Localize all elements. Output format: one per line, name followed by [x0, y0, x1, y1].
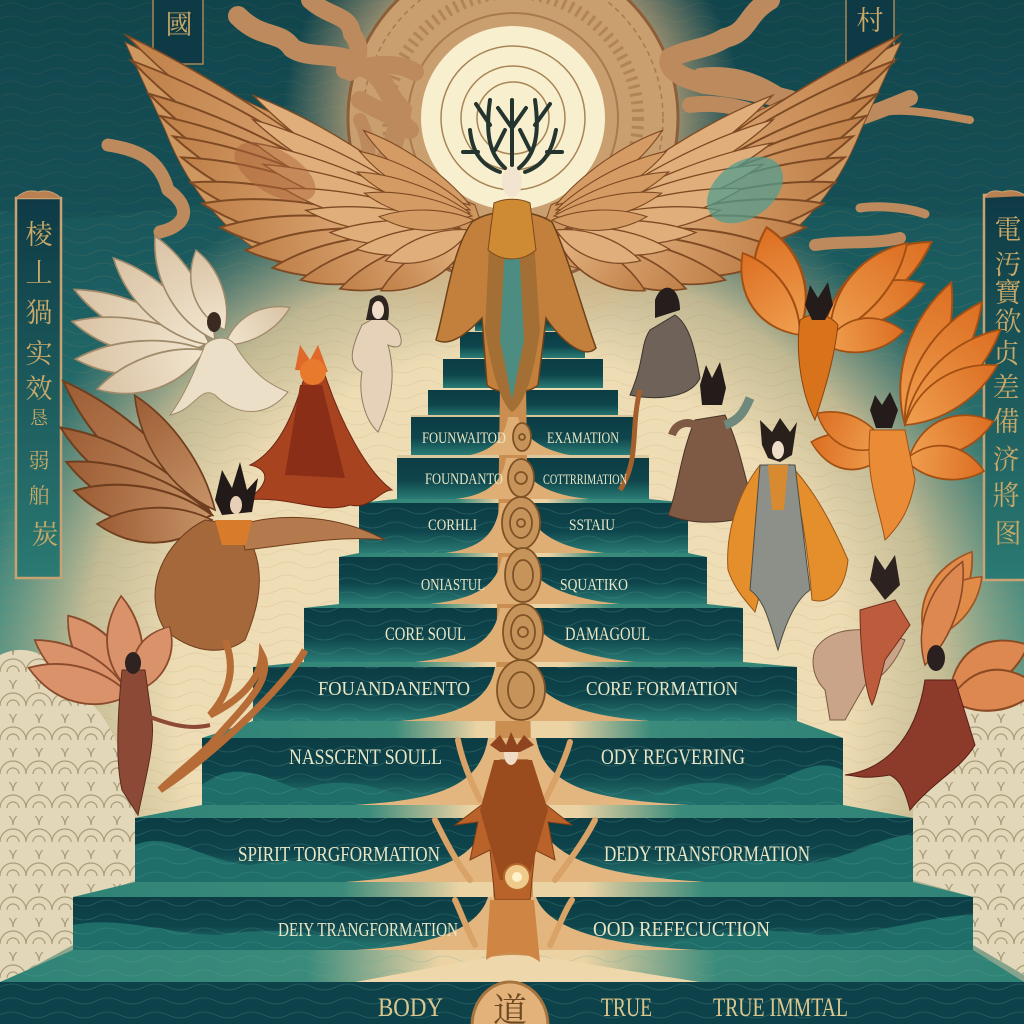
figure: amber robed maiden [728, 418, 848, 650]
cloud bank: lower left [0, 650, 135, 985]
step 2 labels: FOUNDANTO [425, 471, 503, 488]
base step labels: TRUE IMMTAL [713, 993, 848, 1022]
step 5 labels [385, 624, 650, 645]
step 8 labels [238, 841, 810, 866]
step 9 labels [278, 917, 770, 941]
banner: right column: 差 [992, 366, 1020, 405]
step 8 labels: SPIRIT TORGFORMATION [238, 842, 440, 866]
inner robe [485, 225, 540, 412]
central winged deity [436, 100, 596, 412]
wing accent: rust patch [225, 130, 325, 214]
figure: crimson flame robed spirit [245, 345, 392, 508]
figure: winged dancer lower left [23, 594, 210, 815]
step 1 labels: FOUNWAITOD [422, 430, 506, 447]
step 9 labels: DEIY TRANGFORMATION [278, 919, 458, 941]
left wing of central figure [117, 25, 490, 306]
base step labels: TRUE [601, 993, 652, 1022]
banner: right column: 寶 [994, 271, 1022, 310]
sun halo disc with inscribed ring [283, 0, 743, 348]
central energy column with flares on each step [345, 385, 705, 982]
flowing outer robe [436, 212, 596, 392]
base step labels [378, 993, 848, 1022]
wave hills on lower steps [73, 765, 973, 950]
step 2 labels: COTTRRIMATION [543, 472, 627, 488]
treads [0, 415, 1024, 982]
figure: white phoenix spirit [67, 230, 295, 415]
lower central figure [455, 732, 572, 962]
face [502, 167, 522, 197]
wave texture on steps [0, 503, 1024, 1024]
step 2 labels [425, 471, 627, 488]
top steps [428, 315, 618, 417]
base step labels: BODY [378, 993, 443, 1022]
teal inner panel [500, 245, 524, 400]
step labels, left column and right column [238, 430, 810, 941]
banner: right column: 電 [994, 208, 1022, 247]
banner: left column: 弱 [28, 445, 50, 475]
banner: left column [16, 191, 61, 578]
step 4 labels: ONIASTUL [421, 575, 485, 594]
antler crown [463, 100, 562, 172]
banner: left column: 实 [26, 332, 52, 371]
step medallions [497, 423, 545, 720]
banner: top right [846, 0, 894, 62]
banner: right column: 欲 [994, 300, 1022, 339]
banner: left column: 炭 [32, 513, 58, 552]
banner: right column: 汚 [994, 243, 1022, 282]
golden bodice [488, 199, 536, 259]
step 9 labels: OOD REFECUCTION [593, 917, 770, 941]
banner: right column: 將 [992, 474, 1020, 513]
figure: pale robed attendant [352, 295, 401, 432]
banner: left column: 效 [26, 367, 52, 406]
figure: flame phoenix right [808, 276, 1011, 540]
figure: dark robed sage [620, 288, 700, 490]
banner: right column: 济 [992, 438, 1020, 477]
step 7 labels: ODY REGVERING [601, 744, 745, 769]
banner: left column: 丄 [26, 251, 52, 290]
step 7 labels [289, 744, 745, 769]
step 6 labels: FOUANDANENTO [318, 678, 470, 700]
right wing of central figure [536, 25, 909, 306]
banner: right column: 图 [994, 512, 1022, 551]
banner: right column [984, 191, 1024, 580]
staircase [0, 315, 1024, 1024]
step faces [0, 417, 1024, 1024]
smoke cloud: upper left [108, 0, 415, 232]
banner: left column: 恳 [30, 404, 49, 430]
base step seal [472, 982, 548, 1024]
step 7 labels: NASSCENT SOULL [289, 744, 442, 769]
banner: left column: 棱 [26, 213, 52, 252]
cloud texture: lower left [0, 650, 135, 985]
step 1 labels: EXAMATION [547, 430, 619, 447]
wing accent: teal patch [695, 143, 795, 237]
step 5 labels: DAMAGOUL [565, 624, 650, 645]
figure: orange winged spirit upper right [724, 221, 942, 420]
figure: rider with orange wing [813, 542, 992, 720]
figure: dragon-winged spirit [49, 370, 385, 790]
step 8 labels: DEDY TRANSFORMATION [604, 841, 810, 866]
step 3 labels: SSTAIU [569, 517, 615, 534]
step 3 labels: CORHLI [428, 517, 477, 534]
banner: left column: 猧 [26, 291, 52, 330]
figure: crimson winged spirit lower right [845, 556, 1024, 810]
step 5 labels: CORE SOUL [385, 624, 466, 645]
step 1 labels [422, 430, 619, 447]
step 4 labels [421, 575, 628, 594]
banner: top left [153, 0, 203, 64]
step 6 labels [318, 678, 738, 700]
banner: left column: 舶 [28, 480, 50, 510]
step 4 labels: SQUATIKO [560, 575, 628, 594]
cloud texture: lower right [913, 678, 1024, 975]
banner: top right: 村 [856, 0, 884, 38]
step 3 labels [428, 517, 615, 534]
smoke cloud: upper right [669, 0, 970, 245]
sun [421, 26, 605, 210]
banner: right column: 備 [992, 400, 1020, 439]
banner: top left: 國 [166, 3, 192, 42]
figure: standing robed monk [668, 362, 755, 522]
cloud bank: lower right [913, 678, 1024, 975]
banner: right column: 贞 [992, 332, 1020, 371]
flame branches on lower steps [435, 740, 595, 945]
step 6 labels: CORE FORMATION [586, 678, 738, 700]
